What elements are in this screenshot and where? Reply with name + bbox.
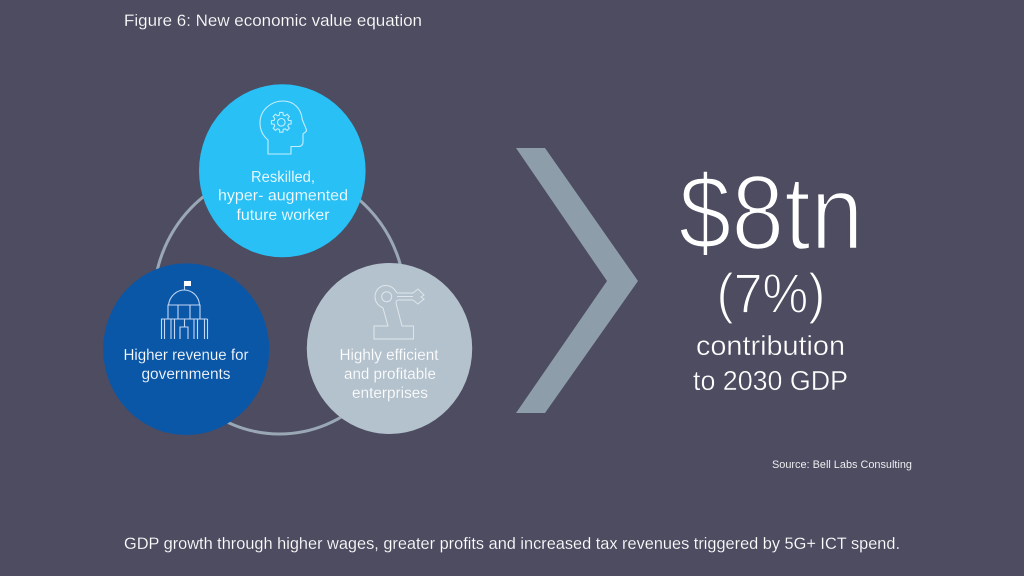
panel: governments [103, 263, 269, 435]
headline figure: $8tn [678, 154, 864, 272]
governments text: Higher revenue for [124, 347, 248, 364]
worker text: Reskilled, [251, 169, 315, 186]
enterprises text: enterprises [352, 385, 428, 402]
enterprises text: Highly efficient [340, 347, 439, 364]
contribution text [693, 330, 848, 396]
worker text: future worker [236, 207, 330, 224]
contribution text: contribution [696, 330, 845, 361]
governments text: governments [142, 366, 231, 383]
panel: enterprises [307, 263, 472, 434]
contribution text: to 2030 GDP [693, 365, 848, 396]
enterprises text [340, 347, 439, 402]
footer statement: GDP growth through higher wages, greater profits and increased tax revenues triggered by 5G+ ICT spend. [124, 535, 900, 553]
source: Source: Bell Labs Consulting [772, 459, 912, 471]
governments text [124, 347, 248, 383]
percentage: (7%) [716, 262, 826, 324]
icon: capitol building [161, 281, 208, 339]
icon: head with gear [260, 101, 306, 154]
connecting ring [154, 170, 406, 434]
title: Figure 6: New economic value equation [124, 12, 422, 30]
worker text [218, 169, 348, 224]
icon: robot arm [374, 286, 424, 339]
arrow: chevron [516, 148, 638, 413]
enterprises text: and profitable [344, 366, 436, 383]
panel: future worker [199, 84, 366, 257]
worker text: hyper- augmented [218, 188, 348, 204]
